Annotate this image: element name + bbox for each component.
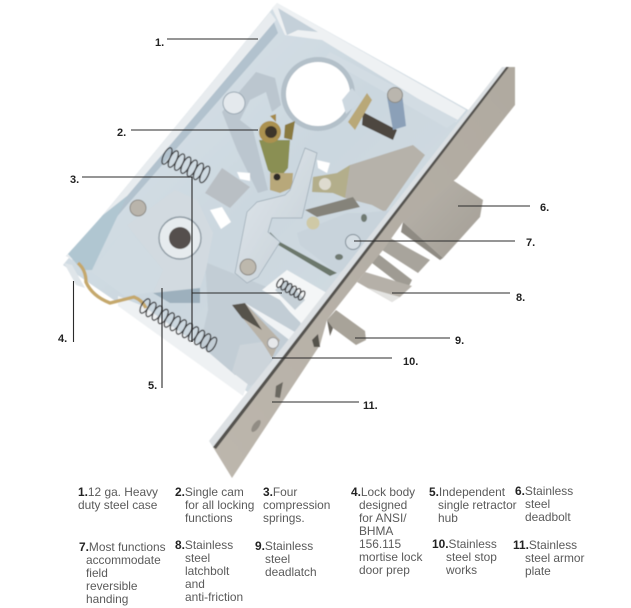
icon: latch spring window <box>262 270 332 330</box>
caption 5: 5. <box>429 485 439 499</box>
caption 11: plate <box>525 564 551 578</box>
icon: threaded stud and post <box>348 88 406 140</box>
icon: bottom flange of case <box>118 296 250 396</box>
leader line and label 8 <box>392 292 525 304</box>
leader line and label 1: 1. <box>155 37 164 49</box>
caption 7: 7. <box>79 540 89 554</box>
caption 3: Four <box>273 485 297 499</box>
caption 8: steel <box>185 551 210 565</box>
icon: deadlatch <box>327 310 366 345</box>
caption 6: Stainless <box>525 484 573 498</box>
icon: spindle hub <box>127 190 213 303</box>
leader line and label 11: 11. <box>363 400 378 412</box>
caption 11: steel armor <box>525 551 585 565</box>
icon: lower lever plate <box>200 262 300 375</box>
caption 8: anti-friction <box>185 590 243 604</box>
icon: case back plate <box>63 3 472 395</box>
leader line and label 9 <box>355 335 464 347</box>
leader line and label 1 <box>155 37 258 49</box>
icon: armor front plate <box>209 67 515 478</box>
leader line and label 4 <box>58 281 74 345</box>
caption 6: 6. <box>515 484 525 498</box>
caption 2: 2. <box>175 485 185 499</box>
leader line and label 5: 5. <box>148 380 157 392</box>
caption 7: Most functions <box>89 540 166 554</box>
caption 1: 1. <box>78 485 88 499</box>
caption 5: single retractor <box>438 498 517 512</box>
leader line and label 9: 9. <box>455 335 464 347</box>
caption 4: mortise lock <box>359 550 422 564</box>
leader line and label 3 <box>70 174 192 342</box>
leader line and label 7: 7. <box>526 237 535 249</box>
leader line and label 8: 8. <box>516 292 525 304</box>
caption 4: for ANSI/ <box>359 511 407 525</box>
caption 3: 3. <box>263 485 273 499</box>
leader line and label 3: 3. <box>70 174 79 186</box>
icon: left flange of case <box>66 12 278 262</box>
caption 8: and <box>185 577 205 591</box>
caption 4: designed <box>359 498 407 512</box>
icon: steel bracket and deadbolt tail <box>270 145 425 276</box>
icon: central lever <box>235 148 317 283</box>
caption 9: deadlatch <box>265 565 317 579</box>
icon: upper compression spring <box>160 146 212 184</box>
caption 2: Single cam <box>185 485 244 499</box>
leader line and label 4: 4. <box>58 333 67 345</box>
lock photo illustration <box>63 3 515 478</box>
caption 3: springs. <box>263 511 305 525</box>
icon: lower compression spring <box>138 297 219 353</box>
icon: pivot arm <box>222 72 281 193</box>
caption 7: accommodate <box>86 553 161 567</box>
caption 7: field <box>86 566 108 580</box>
caption 10: 10. <box>432 537 449 551</box>
leader line and label 6: 6. <box>540 202 549 214</box>
caption 4: 156.115 <box>359 537 401 551</box>
caption 9: 9. <box>255 539 265 553</box>
caption 10: Stainless <box>449 537 497 551</box>
icon: brass leaf spring <box>78 263 146 308</box>
caption 11: 11. <box>513 538 529 552</box>
caption 7: reversible <box>86 579 138 593</box>
leader line and label 6 <box>458 202 549 214</box>
caption 4: door prep <box>359 563 410 577</box>
caption 4: 4. <box>351 485 361 499</box>
leader line and label 5 <box>148 288 282 392</box>
icon: left cavity <box>64 196 163 296</box>
caption 2: functions <box>185 511 233 525</box>
icon: circular cylinder hole <box>281 57 362 131</box>
caption 10: steel stop <box>446 550 497 564</box>
caption 7: handing <box>86 592 128 606</box>
caption 6: deadbolt <box>525 510 571 524</box>
caption 9: Stainless <box>265 539 313 553</box>
icon: latchbolt <box>357 238 430 302</box>
caption 3: compression <box>263 498 330 512</box>
caption 5: Independent <box>439 485 506 499</box>
caption 8: latchbolt <box>185 564 230 578</box>
caption 2: for all locking <box>185 498 254 512</box>
caption 8: 8. <box>175 538 185 552</box>
caption 11: Stainless <box>529 538 577 552</box>
leader line and label 11 <box>272 400 378 412</box>
leader line and label 10: 10. <box>403 356 418 368</box>
caption 5: hub <box>438 511 458 525</box>
icon: deadbolt <box>401 173 483 260</box>
caption 4: Lock body <box>361 485 415 499</box>
caption 4: BHMA <box>359 524 393 538</box>
caption 1: duty steel case <box>78 498 158 512</box>
icon: brass single cam <box>259 114 295 193</box>
caption 10: works <box>445 563 477 577</box>
caption 1: 12 ga. Heavy <box>88 485 158 499</box>
icon: top flange of case <box>272 3 466 128</box>
caption 8: Stainless <box>185 538 233 552</box>
icon: stop works lever <box>232 303 300 386</box>
leader line and label 2: 2. <box>117 127 126 139</box>
icon: guide block <box>205 168 250 229</box>
caption 6: steel <box>525 497 550 511</box>
caption 9: steel <box>265 552 290 566</box>
